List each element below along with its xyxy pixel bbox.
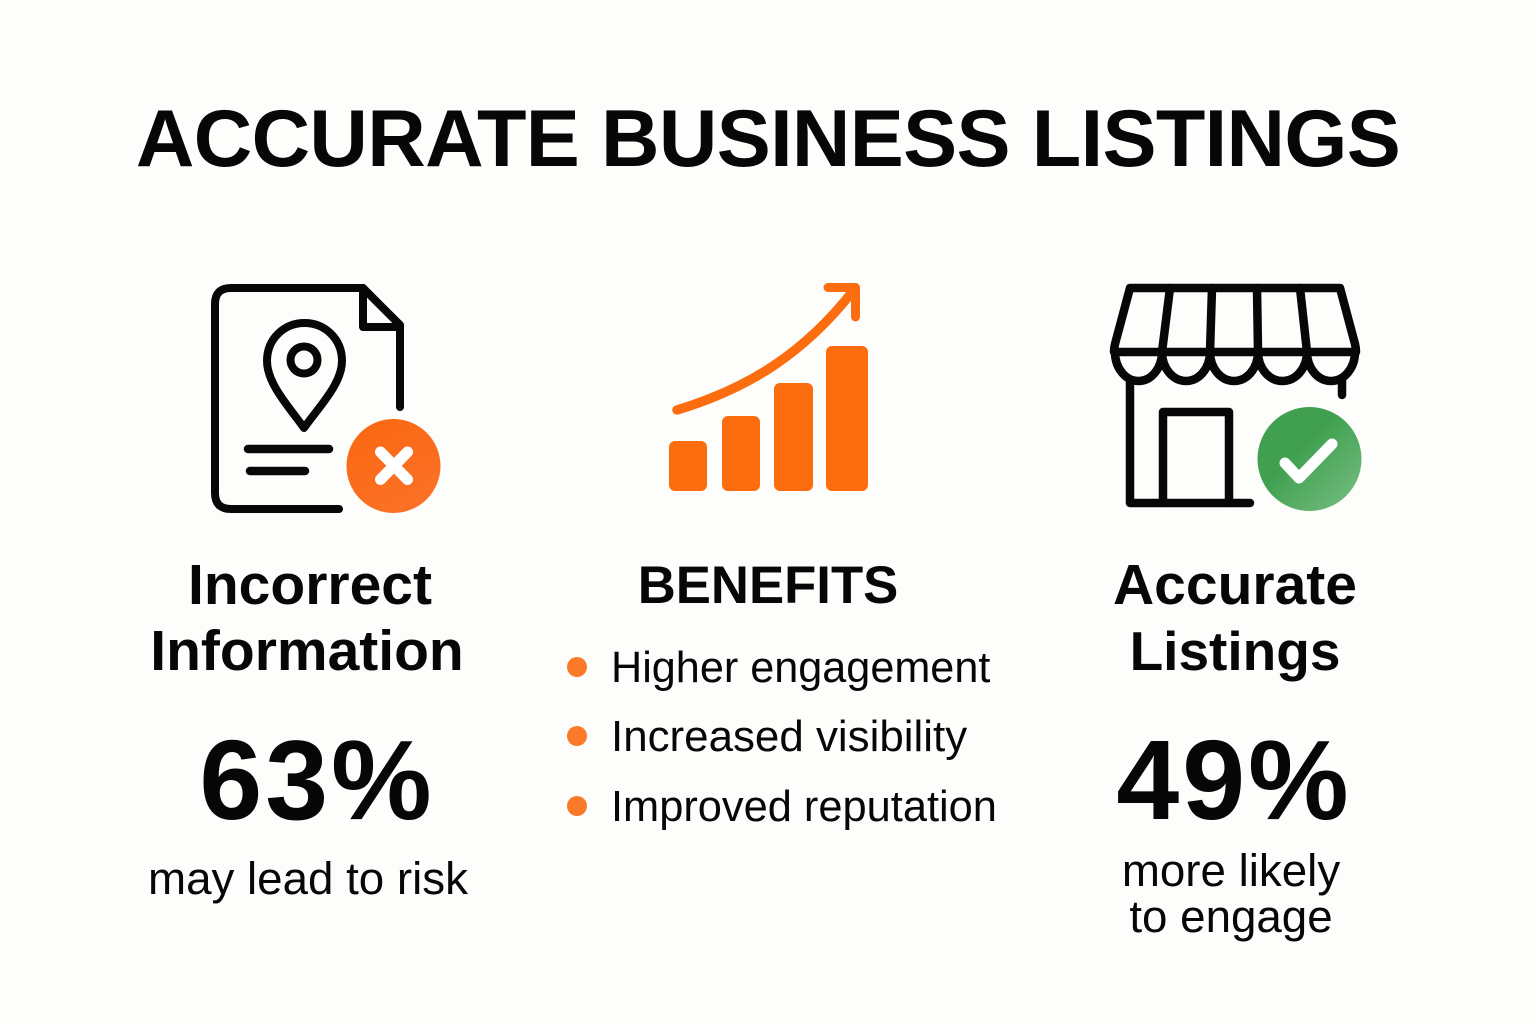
caption: may lead to risk: may lead to risk	[148, 853, 468, 904]
shop walls and door	[1130, 378, 1342, 503]
heading: accurate listings: Listings	[1130, 620, 1340, 682]
bullet: increased visibility: Increased visibility	[611, 712, 967, 761]
heading: accurate listings	[1113, 553, 1357, 682]
heading: incorrect information	[150, 553, 464, 683]
bullet: higher engagement: Higher engagement	[611, 644, 990, 692]
awning	[1114, 288, 1356, 381]
benefits list	[567, 644, 997, 831]
heading: incorrect information: Information	[150, 619, 464, 683]
bars	[669, 346, 868, 491]
rising arrow	[677, 288, 856, 410]
location pin	[267, 323, 342, 428]
stat: 49%: 49%	[1116, 717, 1352, 843]
title: ACCURATE BUSINESS LISTINGS	[136, 94, 1400, 184]
icon: orange bar chart with rising arrow	[669, 283, 868, 491]
caption: more likely to engage: more likely	[1122, 845, 1340, 896]
text lines	[248, 449, 329, 471]
caption: more likely to engage	[1122, 845, 1340, 942]
error badge	[346, 419, 440, 513]
check badge	[1258, 407, 1362, 511]
stat: 63%: 63%	[199, 717, 435, 843]
bullet: improved reputation: Improved reputation	[611, 783, 997, 831]
icon: storefront with check badge	[1110, 284, 1362, 511]
caption: more likely to engage: to engage	[1129, 891, 1333, 942]
document outline	[215, 288, 400, 509]
icon: document with location pin and error badge	[211, 284, 440, 513]
heading: benefits: BENEFITS	[638, 556, 898, 615]
heading: accurate listings: Accurate	[1113, 553, 1357, 617]
heading: incorrect information: Incorrect	[188, 553, 432, 617]
